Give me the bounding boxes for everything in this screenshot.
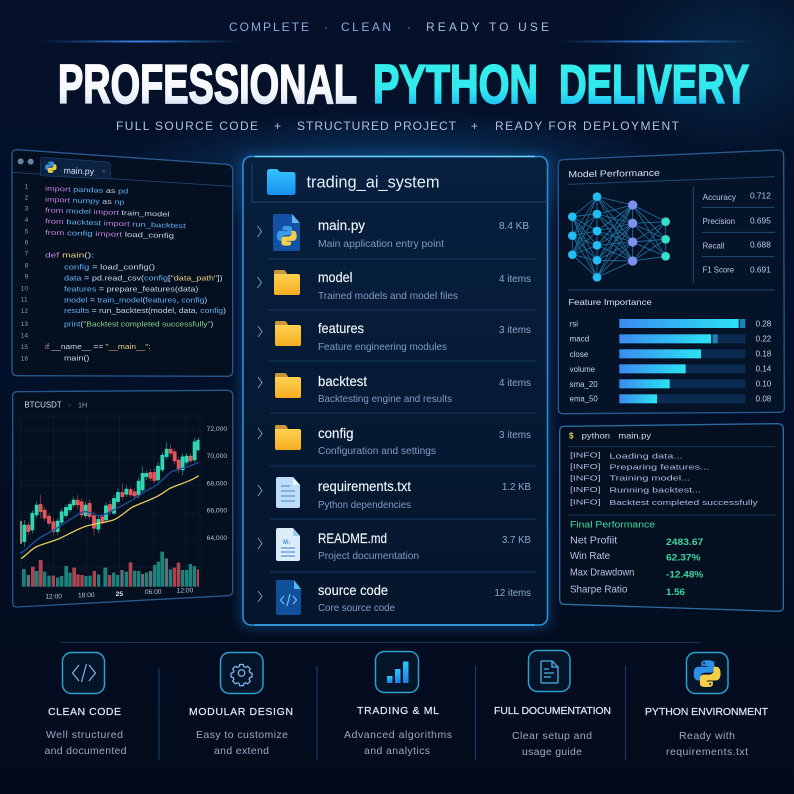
line numbers: 2 bbox=[25, 194, 29, 201]
feature importance bars: sma_20 bbox=[570, 380, 598, 389]
code text: features = prepare_features(data) bbox=[64, 286, 198, 293]
subtitle bbox=[116, 119, 680, 133]
subtitle: + bbox=[274, 119, 281, 133]
code text bbox=[45, 186, 226, 363]
row: config: Configuration and settings bbox=[318, 445, 436, 457]
metrics table bbox=[702, 191, 775, 275]
feature: clean code: CLEAN CODE bbox=[48, 706, 121, 718]
row: source code: Core source code bbox=[318, 602, 395, 614]
code text: from model import train_model bbox=[45, 207, 170, 219]
chart heading: BTCUSDT bbox=[24, 399, 62, 409]
final performance results: Net Profiit bbox=[570, 535, 618, 546]
metrics table: 0.688 bbox=[750, 240, 771, 250]
line numbers: 1 bbox=[25, 184, 29, 191]
code text: print("Backtest completed successfully" ) bbox=[64, 321, 213, 328]
code text: results = run_backtest(model, data, config) bbox=[64, 308, 226, 315]
feature: modular design bbox=[189, 652, 293, 757]
feature: full documentation bbox=[494, 650, 611, 758]
tab: main.py bbox=[41, 157, 110, 179]
code text: model = train_model (features , config) bbox=[64, 297, 207, 304]
feature importance bars: rsi bbox=[570, 319, 578, 328]
metrics table: Recall bbox=[703, 240, 724, 250]
eyebrow: complete clean ready to use bbox=[229, 20, 549, 34]
row: requirements.txt: 1.2 KB bbox=[502, 482, 531, 493]
line numbers: 3 bbox=[25, 206, 29, 213]
code text: def main (): bbox=[45, 252, 94, 259]
feature: python environment: Ready with bbox=[679, 730, 735, 742]
log lines: [INFO] bbox=[570, 462, 601, 471]
row: backtest: 4 items bbox=[499, 378, 531, 389]
metrics table: 0.712 bbox=[750, 191, 771, 201]
feature importance bars: 0.08 bbox=[756, 394, 772, 403]
feature importance bars: ema_50 bbox=[570, 395, 598, 404]
time axis: 25 bbox=[116, 591, 123, 598]
row: requirements.txt bbox=[258, 477, 531, 511]
log lines: [INFO] bbox=[570, 497, 601, 506]
code text: if __name__ == "__main__" : bbox=[45, 344, 151, 351]
code text: main() bbox=[64, 356, 89, 363]
moving averages bbox=[21, 462, 198, 558]
row: config bbox=[258, 425, 531, 457]
log lines: [INFO] bbox=[570, 451, 601, 460]
feature importance bars: 0.14 bbox=[756, 365, 772, 374]
feature importance bars: 0.28 bbox=[756, 319, 772, 328]
feature: python environment: PYTHON ENVIRONMENT bbox=[645, 706, 769, 718]
feature: trading and ml: and analytics bbox=[364, 745, 430, 757]
panel: model performance bbox=[558, 150, 784, 414]
log lines: [INFO] bbox=[570, 473, 601, 482]
log lines: Running backtest... bbox=[609, 486, 701, 495]
price axis: 70,000 bbox=[207, 453, 227, 460]
price axis bbox=[207, 426, 227, 542]
final performance results: 62.37% bbox=[666, 553, 701, 563]
log lines: Backtest completed successfully bbox=[609, 498, 758, 507]
log lines: Preparing features... bbox=[609, 463, 709, 472]
line numbers: 9 bbox=[25, 274, 29, 281]
line numbers: 10 bbox=[21, 285, 28, 292]
line numbers: 13 bbox=[21, 321, 28, 328]
row: README.md: 3.7 KB bbox=[502, 535, 531, 546]
time axis: 12:00 bbox=[45, 593, 62, 601]
feature: full documentation: usage guide bbox=[522, 746, 582, 758]
feature importance bars: close bbox=[570, 350, 589, 359]
feature: python environment bbox=[645, 652, 769, 758]
final performance results: Final Performance bbox=[570, 520, 655, 530]
final performance results: Win Rate bbox=[570, 551, 610, 562]
row: model: 4 items bbox=[499, 274, 531, 285]
heading: feature importance: Feature Importance bbox=[568, 297, 652, 307]
eyebrow: complete clean ready to use: COMPLETE bbox=[229, 20, 309, 34]
log lines: Loading data... bbox=[609, 451, 683, 460]
final performance results: 1.56 bbox=[666, 587, 685, 597]
neural network diagram bbox=[568, 192, 670, 282]
row: backtest: backtest bbox=[318, 373, 367, 389]
feature: full documentation: FULL DOCUMENTATION bbox=[494, 705, 611, 717]
volume bars bbox=[22, 552, 199, 587]
chart heading: · bbox=[68, 399, 71, 409]
panel: candlestick chart bbox=[13, 390, 233, 607]
line numbers bbox=[21, 184, 29, 362]
price axis: 66,000 bbox=[207, 507, 227, 514]
line numbers: 5 bbox=[25, 228, 29, 235]
row: source code bbox=[258, 580, 531, 615]
panel: code editor bbox=[12, 150, 233, 376]
feature importance bars: 0.22 bbox=[756, 335, 772, 344]
final performance results bbox=[570, 520, 704, 597]
metrics table: Accuracy bbox=[703, 192, 737, 202]
line numbers: 15 bbox=[21, 344, 28, 351]
feature: modular design: and extend bbox=[214, 745, 269, 757]
subtitle: FULL SOURCE CODE bbox=[116, 119, 258, 133]
metrics table: Precision bbox=[703, 216, 735, 226]
line numbers: 7 bbox=[25, 251, 29, 258]
final performance results: Max Drawdown bbox=[570, 568, 634, 579]
log lines: [INFO] bbox=[570, 485, 601, 494]
log lines bbox=[570, 451, 758, 507]
heading: model performance: Model Performance bbox=[568, 168, 660, 179]
row: model: model bbox=[318, 269, 352, 285]
eyebrow: complete clean ready to use: · bbox=[324, 20, 328, 34]
eyebrow: complete clean ready to use: CLEAN bbox=[341, 20, 391, 34]
panel: terminal output bbox=[560, 424, 783, 611]
line numbers: 6 bbox=[25, 240, 29, 247]
feature: modular design: MODULAR DESIGN bbox=[189, 706, 293, 718]
row: main.py bbox=[258, 214, 529, 251]
root folder heading: trading_ai_system bbox=[306, 172, 440, 192]
subtitle: STRUCTURED PROJECT bbox=[297, 119, 457, 133]
subtitle: READY FOR DEPLOYMENT bbox=[495, 119, 680, 133]
feature: trading and ml: Advanced algorithms bbox=[344, 729, 452, 741]
root folder heading bbox=[267, 169, 440, 195]
feature importance bars: 0.10 bbox=[756, 380, 772, 389]
title: PROFESSIONAL bbox=[58, 53, 357, 115]
row: features: 3 items bbox=[499, 325, 531, 336]
candles bbox=[21, 438, 199, 547]
code text: config = load_config() bbox=[64, 265, 155, 272]
price axis: 72,000 bbox=[207, 426, 227, 433]
price axis: 68,000 bbox=[207, 480, 227, 487]
row: requirements.txt: requirements.txt bbox=[318, 478, 411, 494]
subtitle: + bbox=[471, 119, 478, 133]
row: features bbox=[258, 320, 531, 353]
feature importance bars: volume bbox=[570, 365, 596, 374]
feature importance bars: macd bbox=[570, 335, 589, 344]
code text: import numpy as np bbox=[45, 197, 125, 206]
panel: project tree bbox=[243, 156, 548, 625]
row: requirements.txt: Python dependencies bbox=[318, 499, 411, 511]
feature importance bars: 0.18 bbox=[756, 350, 772, 359]
feature: trading and ml bbox=[344, 652, 452, 757]
row: source code: 12 items bbox=[494, 588, 531, 599]
row: config: config bbox=[318, 425, 354, 441]
command line bbox=[569, 432, 651, 441]
line numbers: 8 bbox=[25, 262, 29, 269]
line numbers: 12 bbox=[21, 308, 28, 315]
row: README.md: Project documentation bbox=[318, 550, 419, 562]
row: README.md: README.md bbox=[318, 530, 387, 546]
row: source code: source code bbox=[318, 582, 388, 598]
chart heading bbox=[24, 399, 87, 409]
row: backtest bbox=[258, 373, 531, 405]
tab: main.py: × bbox=[102, 170, 106, 176]
row: README.md bbox=[258, 528, 531, 562]
header accent lines bbox=[40, 40, 755, 42]
final performance results: Sharpe Ratio bbox=[570, 584, 627, 595]
feature: clean code: and documented bbox=[44, 745, 127, 757]
row: README.md: M↓ bbox=[283, 540, 291, 546]
row: main.py: main.py bbox=[318, 217, 365, 233]
title bbox=[58, 53, 749, 115]
row: config: 3 items bbox=[499, 430, 531, 441]
time axis: 12:00 bbox=[177, 587, 194, 595]
price axis: 64,000 bbox=[207, 535, 227, 542]
row: backtest: Backtesting engine and results bbox=[318, 393, 452, 405]
line numbers: 11 bbox=[21, 297, 28, 304]
feature: modular design: Easy to customize bbox=[196, 729, 288, 741]
eyebrow: complete clean ready to use: · bbox=[407, 20, 411, 34]
feature: python environment: requirements.txt bbox=[666, 746, 748, 758]
final performance results: -12.48% bbox=[666, 569, 704, 579]
feature: clean code bbox=[44, 652, 127, 757]
code text: import pandas as pd bbox=[45, 186, 129, 196]
line numbers: 4 bbox=[25, 217, 29, 224]
time axis: 18:00 bbox=[78, 592, 95, 599]
row: features: features bbox=[318, 320, 364, 336]
code text: from backtest import run_backtest bbox=[45, 218, 186, 230]
line numbers: 14 bbox=[21, 333, 28, 340]
feature importance bars bbox=[570, 319, 772, 404]
feature: trading and ml: TRADING & ML bbox=[357, 705, 439, 717]
time axis bbox=[45, 587, 194, 601]
row: features: Feature engineering modules bbox=[318, 341, 447, 353]
line numbers: 16 bbox=[21, 355, 28, 362]
tab: main.py: main.py bbox=[64, 165, 95, 176]
command line: python bbox=[582, 432, 610, 441]
metrics table: 0.691 bbox=[750, 265, 771, 275]
code text: data = pd.read_csv( config ["data_path" ]) bbox=[64, 276, 223, 283]
row: main.py: Main application entry point bbox=[318, 238, 444, 250]
code text: from config import load_config bbox=[45, 230, 174, 240]
metrics table: F1 Score bbox=[703, 265, 734, 275]
row: main.py: 8.4 KB bbox=[499, 221, 529, 232]
time axis: 06:00 bbox=[145, 589, 162, 596]
feature: clean code: Well structured bbox=[46, 729, 123, 741]
eyebrow: complete clean ready to use: READY TO USE bbox=[426, 20, 549, 34]
log lines: Training model... bbox=[609, 474, 690, 483]
row: model: Trained models and model files bbox=[318, 290, 458, 302]
metrics table: 0.695 bbox=[750, 215, 771, 225]
final performance results: 2483.67 bbox=[666, 537, 703, 547]
chart heading: 1H bbox=[78, 400, 87, 409]
title: PYTHON bbox=[373, 53, 538, 115]
command line: $ bbox=[569, 432, 574, 441]
row: model bbox=[258, 269, 531, 302]
command line: main.py bbox=[618, 432, 651, 441]
feature: full documentation: Clear setup and bbox=[512, 730, 592, 742]
